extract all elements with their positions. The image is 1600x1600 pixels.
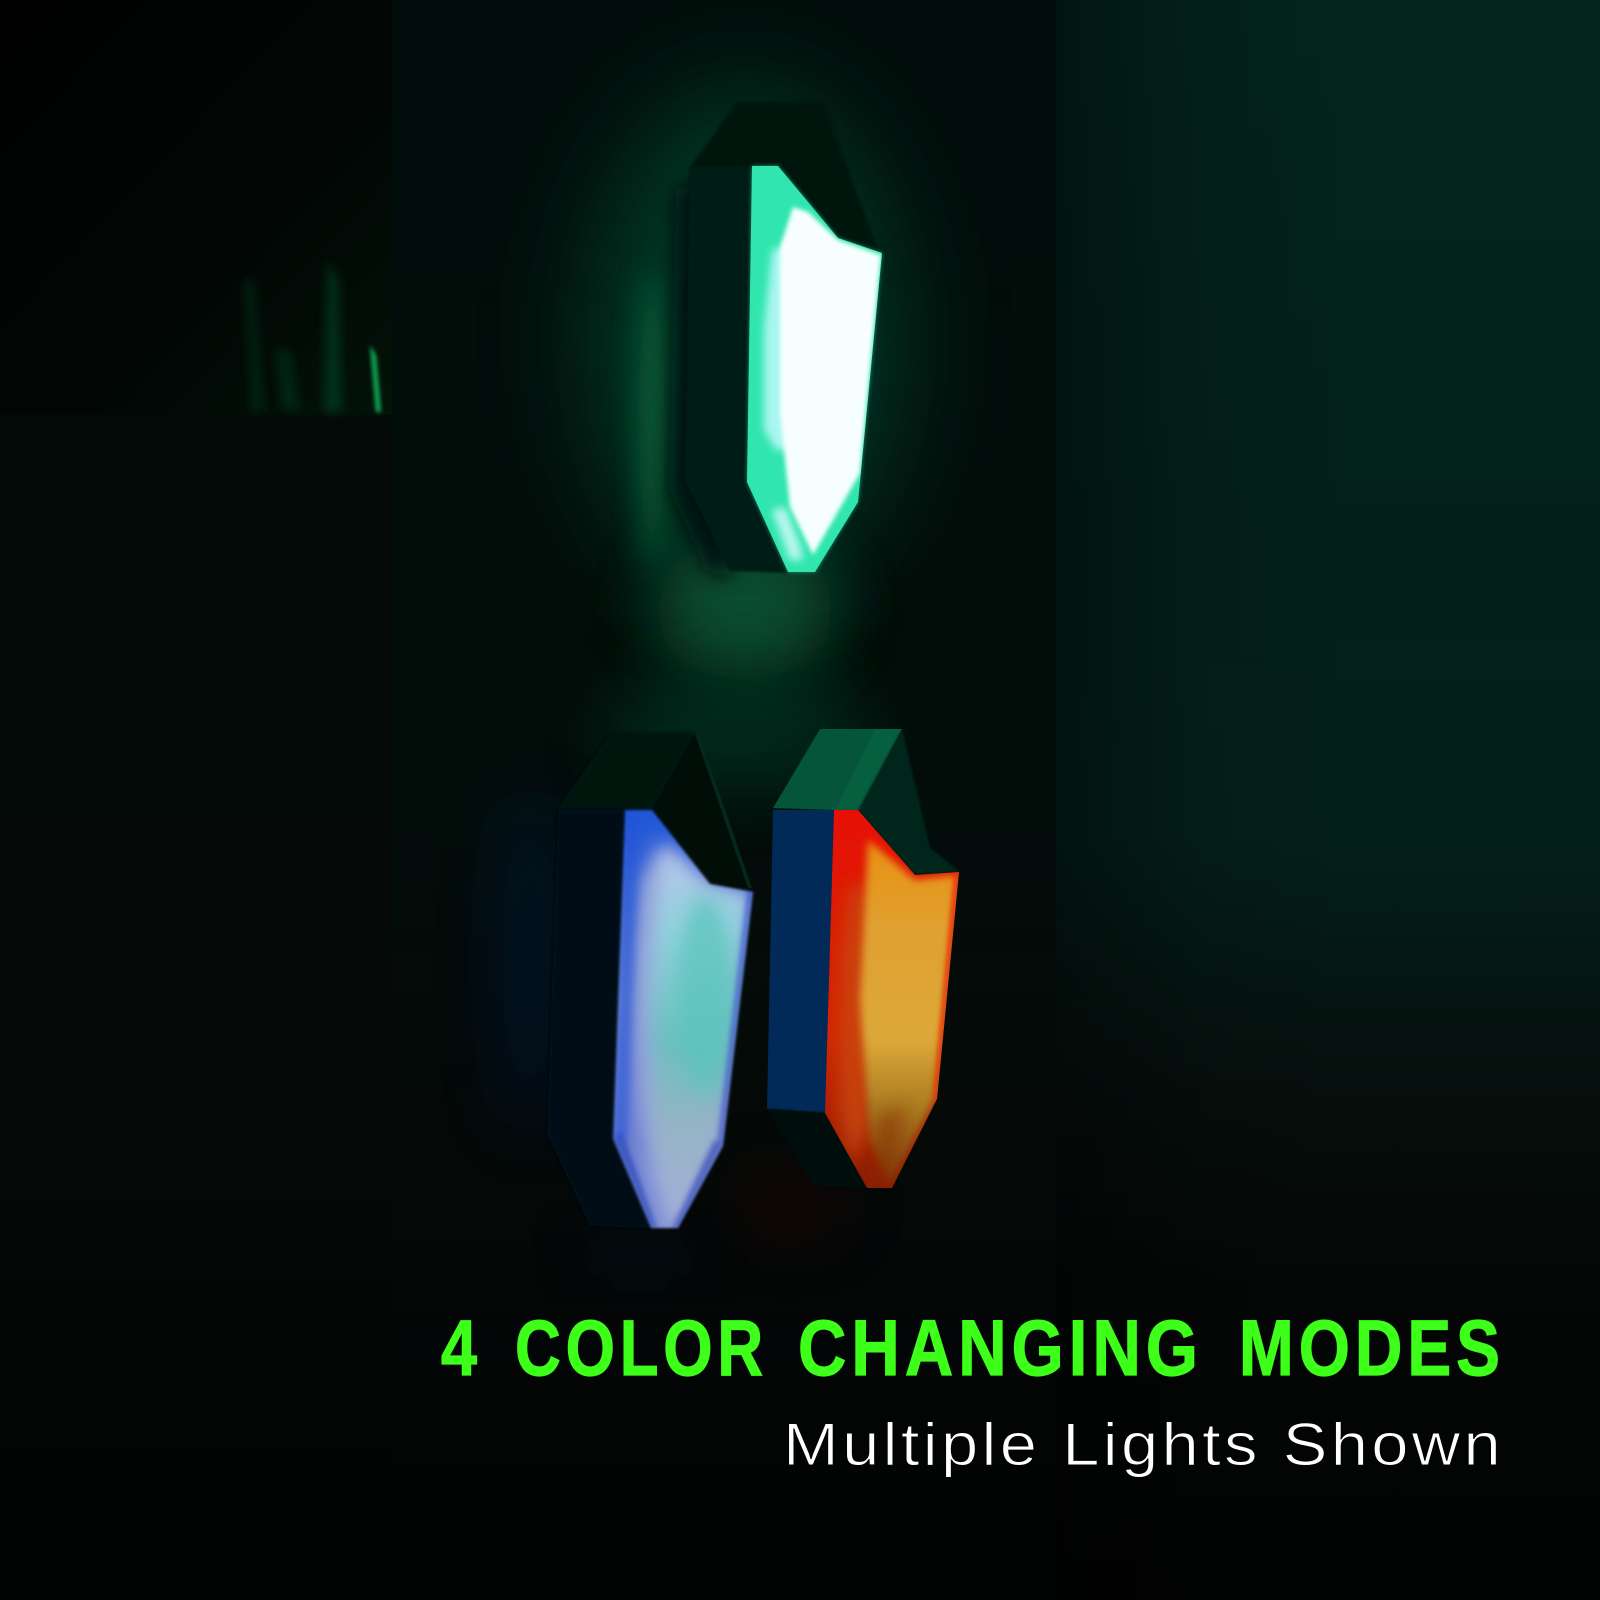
subheading: Multiple Lights Shown: [783, 1411, 1504, 1478]
orange fixture side: [767, 810, 834, 1113]
orange fixture top: [773, 729, 902, 810]
wall glow: [500, 90, 895, 1270]
green light fixture: [670, 102, 882, 580]
headline: 4: [441, 1303, 477, 1392]
orange fixture dark facet: [858, 729, 960, 875]
headline: COLOR: [515, 1303, 768, 1392]
headline: MODES: [1239, 1303, 1505, 1392]
headline: CHANGING: [798, 1303, 1203, 1392]
glint on panel edge: [370, 345, 381, 412]
blue glowing face: [613, 810, 753, 1235]
blue fixture body: [547, 734, 750, 1228]
orange light fixture: [767, 729, 960, 1188]
green glowing face: [747, 166, 882, 572]
infographic scene: [240, 0, 1600, 1477]
blue light fixture: [547, 734, 753, 1235]
green fixture shadow: [670, 170, 730, 580]
orange glowing face: [825, 810, 959, 1188]
green fixture body: [685, 102, 882, 572]
wall panel upper left: [0, 0, 392, 415]
